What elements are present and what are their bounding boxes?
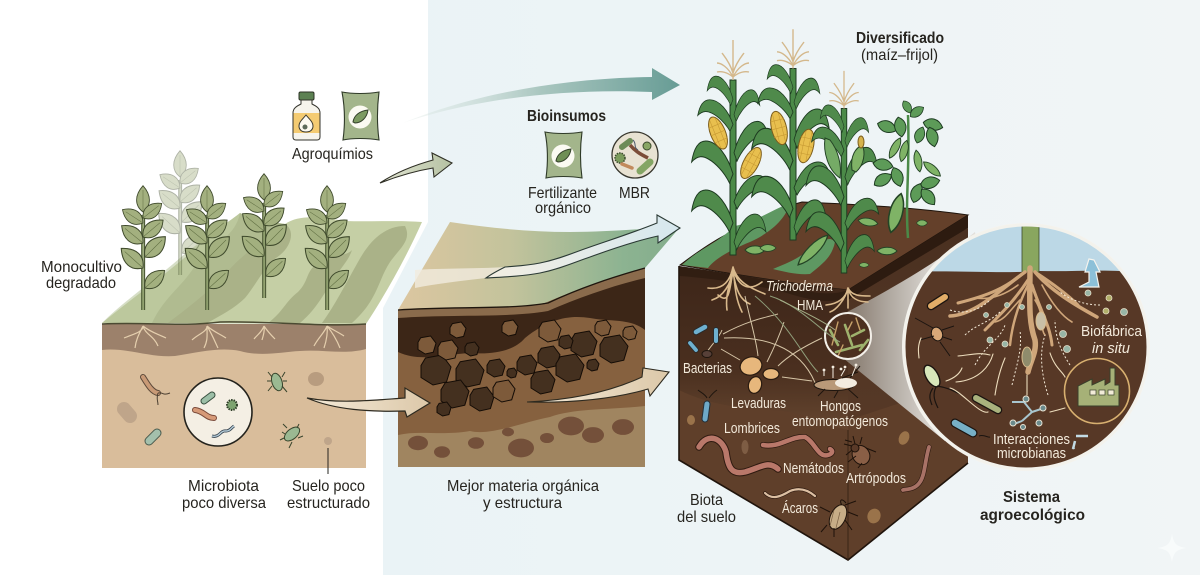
circle outline: [904, 225, 1148, 469]
soil organisms: [124, 372, 332, 474]
label: Suelo poco estructurado: [287, 478, 370, 512]
label: Biofábrica in situ: in situ: [1092, 340, 1131, 357]
label: Monocultivo degradado: [41, 259, 122, 292]
aggregates: [418, 320, 637, 416]
microbes: [915, 297, 998, 437]
thin lighter top band: [398, 268, 645, 318]
label: Interacciones microbianas: [993, 431, 1070, 462]
panel: degraded monoculture block: [102, 151, 422, 474]
front soil: [398, 268, 645, 467]
flow arrows: [918, 338, 1065, 412]
furrows: [152, 213, 407, 323]
label: Biota del suelo: [677, 492, 736, 526]
green strips: [682, 203, 790, 268]
magnifier small circle: [825, 313, 871, 359]
crops: maize and bean plants: [692, 29, 944, 273]
label: Fertilizante orgánico: Fertilizante: [528, 185, 597, 202]
maize plant 2: [752, 29, 831, 240]
right face: [848, 228, 968, 560]
label: Fertilizante orgánico: [528, 185, 597, 217]
panel: magnified rhizosphere circle: [900, 220, 1150, 480]
faded plant: [154, 151, 207, 275]
lighter lower soil layer: [679, 385, 968, 560]
label: Biofábrica in situ: Biofábrica: [1081, 323, 1143, 340]
white labels in soil: Nemátodos: [783, 460, 844, 477]
label: Biota del suelo: Biota: [690, 492, 723, 509]
heading: Diversificado (maíz–frijol): [856, 30, 944, 64]
plant stem: [1022, 223, 1039, 272]
label: MBR: MBR: [619, 185, 650, 202]
nutrient dots: [984, 290, 1128, 352]
surface: [398, 222, 680, 310]
microbial exudates: [950, 292, 1100, 395]
lower tan layer: [398, 406, 645, 467]
topsoil band: [102, 324, 366, 356]
label: Microbiota poco diversa: [182, 478, 266, 512]
arthropod spider: [844, 436, 876, 468]
panel: soil biota block: [679, 202, 990, 560]
label: Fertilizante orgánico: orgánico: [535, 200, 591, 217]
pods on ground: [745, 217, 928, 268]
label: Suelo poco estructurado: Suelo poco: [292, 478, 365, 495]
arrow: long upper arrow to diversified system: [403, 68, 680, 123]
icon: organic fertilizer bag: [545, 132, 582, 178]
icon: MBR microbes: [612, 132, 658, 178]
up arrow: [1079, 259, 1100, 287]
white labels in soil: Bacterias: [683, 360, 732, 377]
label: Suelo poco estructurado: estructurado: [287, 495, 370, 512]
label: Mejor materia orgánica y estructura: y estructura: [483, 495, 562, 512]
root nodules: [1022, 312, 1046, 367]
label: Agroquímios: Agroquímios: [292, 146, 373, 163]
label: Biofábrica in situ: [1081, 323, 1143, 357]
left face: [679, 266, 848, 560]
arrow: light arrow over middle block: [415, 215, 680, 288]
beetle: [820, 500, 858, 537]
bacteria: [690, 327, 717, 419]
white labels in soil: entomopatógenos: [792, 413, 888, 430]
earthworms: [699, 437, 929, 490]
heading: Sistema agroecológico: agroecológico: [980, 507, 1085, 524]
label: Microbiota poco diversa: poco diversa: [182, 495, 266, 512]
front face subsoil: [102, 324, 366, 468]
biota connection lines: [707, 296, 840, 385]
shallow roots: [124, 326, 344, 348]
entomopathogenic fungi insect: [814, 364, 860, 398]
thick roots: [950, 268, 1097, 372]
white labels in soil: Hongos: [820, 398, 861, 415]
arrow: agrochemicals path: [380, 153, 452, 183]
arrow: soil improvement to middle block: [307, 388, 430, 417]
maize plant 1: [692, 40, 771, 255]
maize plant 3: [806, 71, 879, 273]
sparse plants: [116, 174, 355, 310]
heading: Diversificado (maíz–frijol): Diversificado: [856, 30, 944, 47]
label: Microbiota poco diversa: Microbiota: [188, 478, 259, 495]
arrow: improved soil to soil biota: [527, 368, 669, 402]
bean plant: [871, 99, 944, 238]
microbiota lens: [184, 378, 252, 446]
icon: sparkle: [1158, 534, 1186, 562]
heading: Sistema agroecológico: [980, 489, 1085, 524]
label: Mejor materia orgánica y estructura: [447, 478, 599, 512]
label: Mejor materia orgánica y estructura: Mejor materia orgánica: [447, 478, 599, 495]
label: Monocultivo degradado: degradado: [46, 275, 116, 292]
dark upper layer: [398, 278, 645, 357]
label: Interacciones microbianas: Interacciones: [993, 431, 1070, 448]
soil surface: [102, 213, 422, 324]
roots: [708, 267, 870, 312]
panel: improved soil block: [398, 222, 680, 467]
soil: [900, 271, 1150, 480]
nematode: [765, 489, 815, 497]
label: Biota del suelo: del suelo: [677, 509, 736, 526]
white labels in soil: Artrópodos: [846, 470, 906, 487]
icon: agrochemical bottle: [293, 92, 320, 140]
white labels in soil: [683, 278, 906, 517]
yeast cells: [738, 354, 779, 395]
factory icon: [1064, 358, 1130, 424]
white labels in soil: HMA: [797, 297, 823, 314]
heading: Sistema agroecológico: Sistema: [1003, 489, 1060, 506]
block top surface: [680, 202, 968, 290]
label: Monocultivo degradado: Monocultivo: [41, 259, 122, 276]
white labels in soil: Levaduras: [731, 395, 786, 412]
icon: fertilizer bag (agrochemicals): [342, 92, 379, 140]
lower stones: [408, 417, 634, 458]
background: white left area: [0, 0, 428, 575]
heading: Bioinsumos: Bioinsumos: [527, 108, 606, 125]
soil pebbles: [687, 415, 911, 525]
small rods: [1073, 436, 1088, 449]
label: Interacciones microbianas: microbianas: [997, 445, 1066, 462]
right top rim: [848, 215, 968, 300]
cone to magnified circle: [843, 232, 990, 441]
white labels in soil: Lombrices: [724, 420, 780, 437]
white labels in soil: Ácaros: [782, 500, 818, 517]
sky: [932, 226, 1120, 272]
white labels in soil: Trichoderma: [766, 278, 833, 295]
heading: Diversificado (maíz–frijol): (maíz–frijol): [861, 47, 938, 64]
microbial network: [1010, 396, 1046, 430]
